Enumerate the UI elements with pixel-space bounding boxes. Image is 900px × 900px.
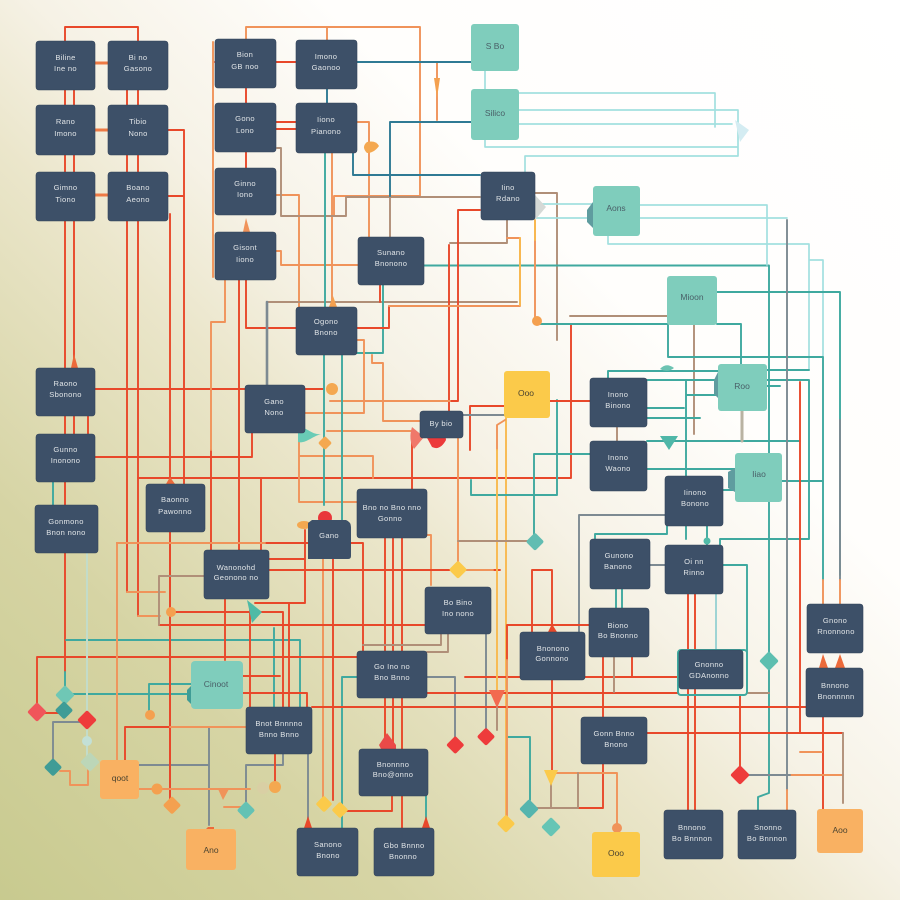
node: top left 2: Gasono: [124, 64, 152, 73]
node: centre left: [245, 385, 305, 433]
teal node: fifth: [718, 364, 767, 411]
node: z: [665, 545, 723, 594]
node: column 2 f: Iiono: [236, 255, 254, 264]
teal node: fifth: Roo: [734, 381, 750, 391]
teal node: lower left: Cinoot: [204, 679, 229, 689]
teal node: top: S Bo: [486, 41, 504, 51]
node: column 2 a: GB noo: [231, 62, 259, 71]
node: ff: Bo Bnnnon: [747, 834, 787, 843]
node: left i: Gonmono: [48, 517, 84, 526]
node: p: Bnno Bnno: [259, 730, 299, 739]
teal node: fourth: [667, 276, 717, 325]
node: s: Bnonno: [389, 852, 417, 861]
node: z: Oi nn: [684, 557, 704, 566]
node: top left 1: Ine no: [54, 64, 77, 73]
node: x: Iinono: [684, 488, 706, 497]
node: t: [420, 411, 463, 438]
node: left h: [36, 434, 95, 482]
node: n: Ino nono: [442, 609, 474, 618]
node: dd: [581, 717, 647, 764]
node: gg: Rnonnono: [817, 627, 855, 636]
node: n: [425, 587, 491, 634]
node: w: Inono: [608, 453, 628, 462]
node: column 2 a: Bion: [237, 50, 253, 59]
node: left 6: Aeono: [126, 195, 150, 204]
teal node: second: [471, 89, 519, 140]
node: left i: Bnon nono: [46, 528, 86, 537]
node: v: [590, 378, 647, 427]
node: j: Baonno: [161, 495, 189, 504]
node: column 2 d: Pianono: [311, 127, 341, 136]
orange node: left: [100, 760, 139, 799]
node: left g: Sbonono: [49, 390, 82, 399]
teal node: sixth: [735, 453, 782, 502]
node: left 3: Rano: [56, 117, 75, 126]
node: w: Waono: [605, 464, 631, 473]
node: left 4: Nono: [128, 129, 148, 138]
yellow node: centre: [504, 371, 550, 418]
node: left 3: [36, 105, 95, 155]
node: gg: Gnono: [823, 616, 847, 625]
node: cc with outline: [678, 650, 747, 695]
node: j: Pawonno: [158, 507, 192, 516]
node: cc with outline: GDAnonno: [689, 671, 729, 680]
node: s: [374, 828, 434, 876]
node: column 2 e: Iono: [237, 190, 253, 199]
node: left 6: Boano: [126, 183, 150, 192]
teal node: fourth: Mioon: [680, 292, 704, 302]
node: centre upper: Sunano: [377, 248, 405, 257]
node: column 2 b: Imono: [315, 52, 337, 61]
node: y: Gunono: [605, 551, 633, 560]
teal node: sixth: Iiao: [752, 469, 766, 479]
orange node: bottom left: Ano: [203, 845, 219, 855]
node: r: [297, 828, 358, 876]
node: ff: [738, 810, 796, 859]
connector lines: [37, 27, 843, 830]
node: centre left: Nono: [264, 408, 284, 417]
orange node: bottom left: [186, 829, 236, 870]
node: top left 2: Bi no: [129, 53, 147, 62]
node: left 4: [108, 105, 168, 155]
node: left h: Gunno: [53, 445, 78, 454]
node: column 2 a: [215, 39, 276, 88]
yellow node: bottom: Ooo: [608, 848, 624, 858]
node: v: Binono: [605, 401, 631, 410]
node: x: Bonono: [681, 499, 709, 508]
node: u: Rdano: [496, 194, 520, 203]
node: bb: [520, 632, 585, 680]
node: gg: [807, 604, 863, 653]
node: y: Banono: [604, 562, 632, 571]
teal node: lower left: [191, 661, 243, 709]
node: hh: [806, 668, 863, 717]
node: column 2 c: Lono: [236, 126, 254, 135]
node: centre upper: Bnonono: [375, 259, 407, 268]
node: centre: Ogono: [314, 317, 338, 326]
orange node: bottom right: Aoo: [832, 825, 848, 835]
node: k: Geonono no: [214, 573, 258, 582]
node: left 4: Tibio: [129, 117, 147, 126]
node: column 2 c: Gono: [235, 114, 255, 123]
node: x: [665, 476, 723, 526]
node: centre left: Gano: [264, 397, 284, 406]
node: s: Gbo Bnnno: [383, 841, 425, 850]
node: o: [357, 651, 427, 698]
node: q: Bno@onno: [373, 770, 413, 779]
node: n: Bo Bino: [444, 598, 472, 607]
node: bb: Bnonono: [537, 644, 569, 653]
node: column 2 c: [215, 103, 276, 152]
node: centre: [296, 307, 357, 355]
node: v: Inono: [608, 390, 628, 399]
node: column 2 b: Gaonoo: [312, 63, 340, 72]
node: hh: Bnnono: [821, 681, 849, 690]
node: p: [246, 707, 312, 754]
node: column 2 e: [215, 168, 276, 215]
node: left 6: [108, 172, 168, 221]
orange node: left: qoot: [112, 773, 129, 783]
node: small centre: Gano: [319, 531, 339, 540]
node: y: [590, 539, 650, 589]
node: k: Wanonohd: [217, 563, 255, 572]
node: column 2 b: [296, 40, 357, 89]
node: column 2 d: [296, 103, 357, 153]
teal node: third: [593, 186, 640, 236]
node: left h: Inonono: [51, 456, 80, 465]
node: o: Go Ino no: [374, 662, 410, 671]
node: j: [146, 484, 205, 532]
node: m: [357, 489, 427, 538]
node: q: [359, 749, 428, 796]
orange node: bottom right: [817, 809, 863, 853]
node: o: Bno Bnno: [374, 673, 410, 682]
node: column 2 e: Ginno: [234, 179, 256, 188]
node: hh: Bnonnnnn: [817, 692, 855, 701]
node: m: Bno no Bno nno: [363, 503, 421, 512]
node: top left 1: [36, 41, 95, 90]
node: u: [481, 172, 535, 220]
node: column 2 f: [215, 232, 276, 280]
node: p: Bnot Bnnnno: [255, 719, 303, 728]
node: left i: [35, 505, 98, 553]
node: centre upper: [358, 237, 424, 285]
teal node: third: Aons: [606, 203, 626, 213]
node: column 2 d: Iiono: [317, 115, 335, 124]
node: ff: Snonno: [754, 823, 782, 832]
teal node: top: [471, 24, 519, 71]
node: dd: Gonn Bnno: [593, 729, 635, 738]
node: left 3: Imono: [54, 129, 77, 138]
node: ee: Bo Bnnnon: [672, 834, 712, 843]
node: left 5: Gimno: [54, 183, 77, 192]
node: left g: Raono: [54, 379, 77, 388]
node: centre: Bnono: [314, 328, 338, 337]
node: t: By bio: [430, 419, 452, 428]
diamonds and markers: [27, 78, 845, 837]
node: m: Gonno: [378, 514, 402, 523]
node: small centre: [308, 520, 351, 559]
node: column 2 f: Gisont: [233, 243, 257, 252]
node: w: [590, 441, 647, 491]
node: left 5: [36, 172, 95, 221]
node: ee: Bnnono: [678, 823, 706, 832]
node: q: Bnonnno: [377, 760, 409, 769]
node: r: Bnono: [316, 851, 340, 860]
node: aa: Biono: [608, 621, 628, 630]
node: bb: Gonnono: [535, 654, 569, 663]
node: r: Sanono: [314, 840, 342, 849]
node: u: Iino: [501, 183, 515, 192]
node: top left 2: [108, 41, 168, 90]
node: dd: Bnono: [604, 740, 628, 749]
node: cc with outline: Gnonno: [695, 660, 723, 669]
teal node: second: Silico: [485, 108, 505, 118]
node: aa: Bo Bnonno: [598, 631, 638, 640]
node: ee: [664, 810, 723, 859]
node: left 5: Tiono: [55, 195, 76, 204]
node: k: [204, 550, 269, 599]
yellow node: bottom: [592, 832, 640, 877]
node: aa: [589, 608, 649, 657]
yellow node: centre: Ooo: [518, 388, 534, 398]
node: z: Rinno: [683, 568, 705, 577]
node: left g: [36, 368, 95, 416]
node: top left 1: Biline: [55, 53, 76, 62]
